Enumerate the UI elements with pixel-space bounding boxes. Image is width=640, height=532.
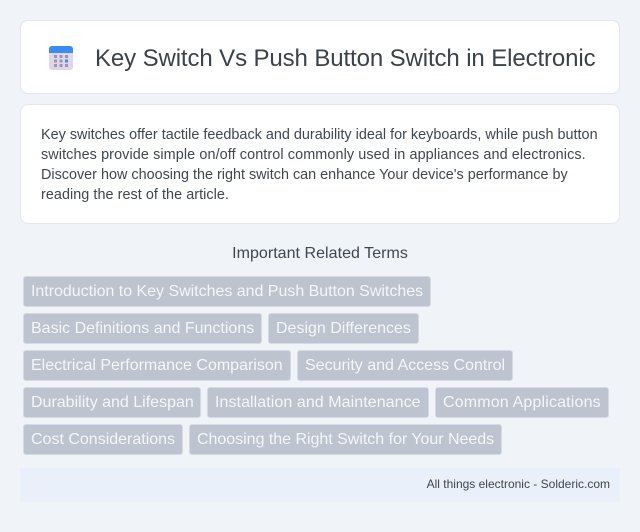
tag: [23, 387, 201, 418]
tag: [189, 424, 502, 455]
tag: Choosing the Right Switch for Your Needs: [197, 431, 494, 448]
tag: [23, 276, 431, 307]
intro paragraph: Key switches offer tactile feedback and durability ideal for keyboards, while push button: [41, 127, 598, 143]
icon: calendar: [49, 46, 73, 70]
footer: [20, 468, 620, 502]
tag: [268, 313, 419, 344]
tag: Common Applications: [443, 394, 601, 411]
intro paragraph: reading the rest of the article.: [41, 187, 229, 203]
tag: Basic Definitions and Functions: [31, 320, 254, 337]
tag: [23, 424, 183, 455]
tag: Installation and Maintenance: [215, 394, 421, 411]
intro paragraph: [41, 127, 598, 203]
intro paragraph: Discover how choosing the right switch can enhance Your device's performance by: [41, 167, 568, 183]
related terms heading: Important Related Terms: [232, 245, 408, 262]
tag: [435, 387, 609, 418]
tag: Security and Access Control: [305, 357, 505, 374]
tag: Electrical Performance Comparison: [31, 357, 283, 374]
intro text panel: [20, 104, 620, 224]
tag: Design Differences: [276, 320, 411, 337]
related terms tags: [23, 276, 609, 455]
tag: [207, 387, 429, 418]
tag: [23, 350, 291, 381]
tag: Introduction to Key Switches and Push Button Switches: [31, 283, 423, 300]
tag: [297, 350, 513, 381]
intro paragraph: switches provide simple on/off control commonly used in appliances and electronics.: [41, 147, 586, 163]
tag: Cost Considerations: [31, 431, 175, 448]
footer: All things electronic - Solderic.com: [427, 477, 610, 491]
title: Key Switch Vs Push Button Switch in Electronic: [95, 45, 596, 72]
tag: Durability and Lifespan: [31, 394, 194, 411]
tag: [23, 313, 262, 344]
header panel: [20, 20, 620, 94]
